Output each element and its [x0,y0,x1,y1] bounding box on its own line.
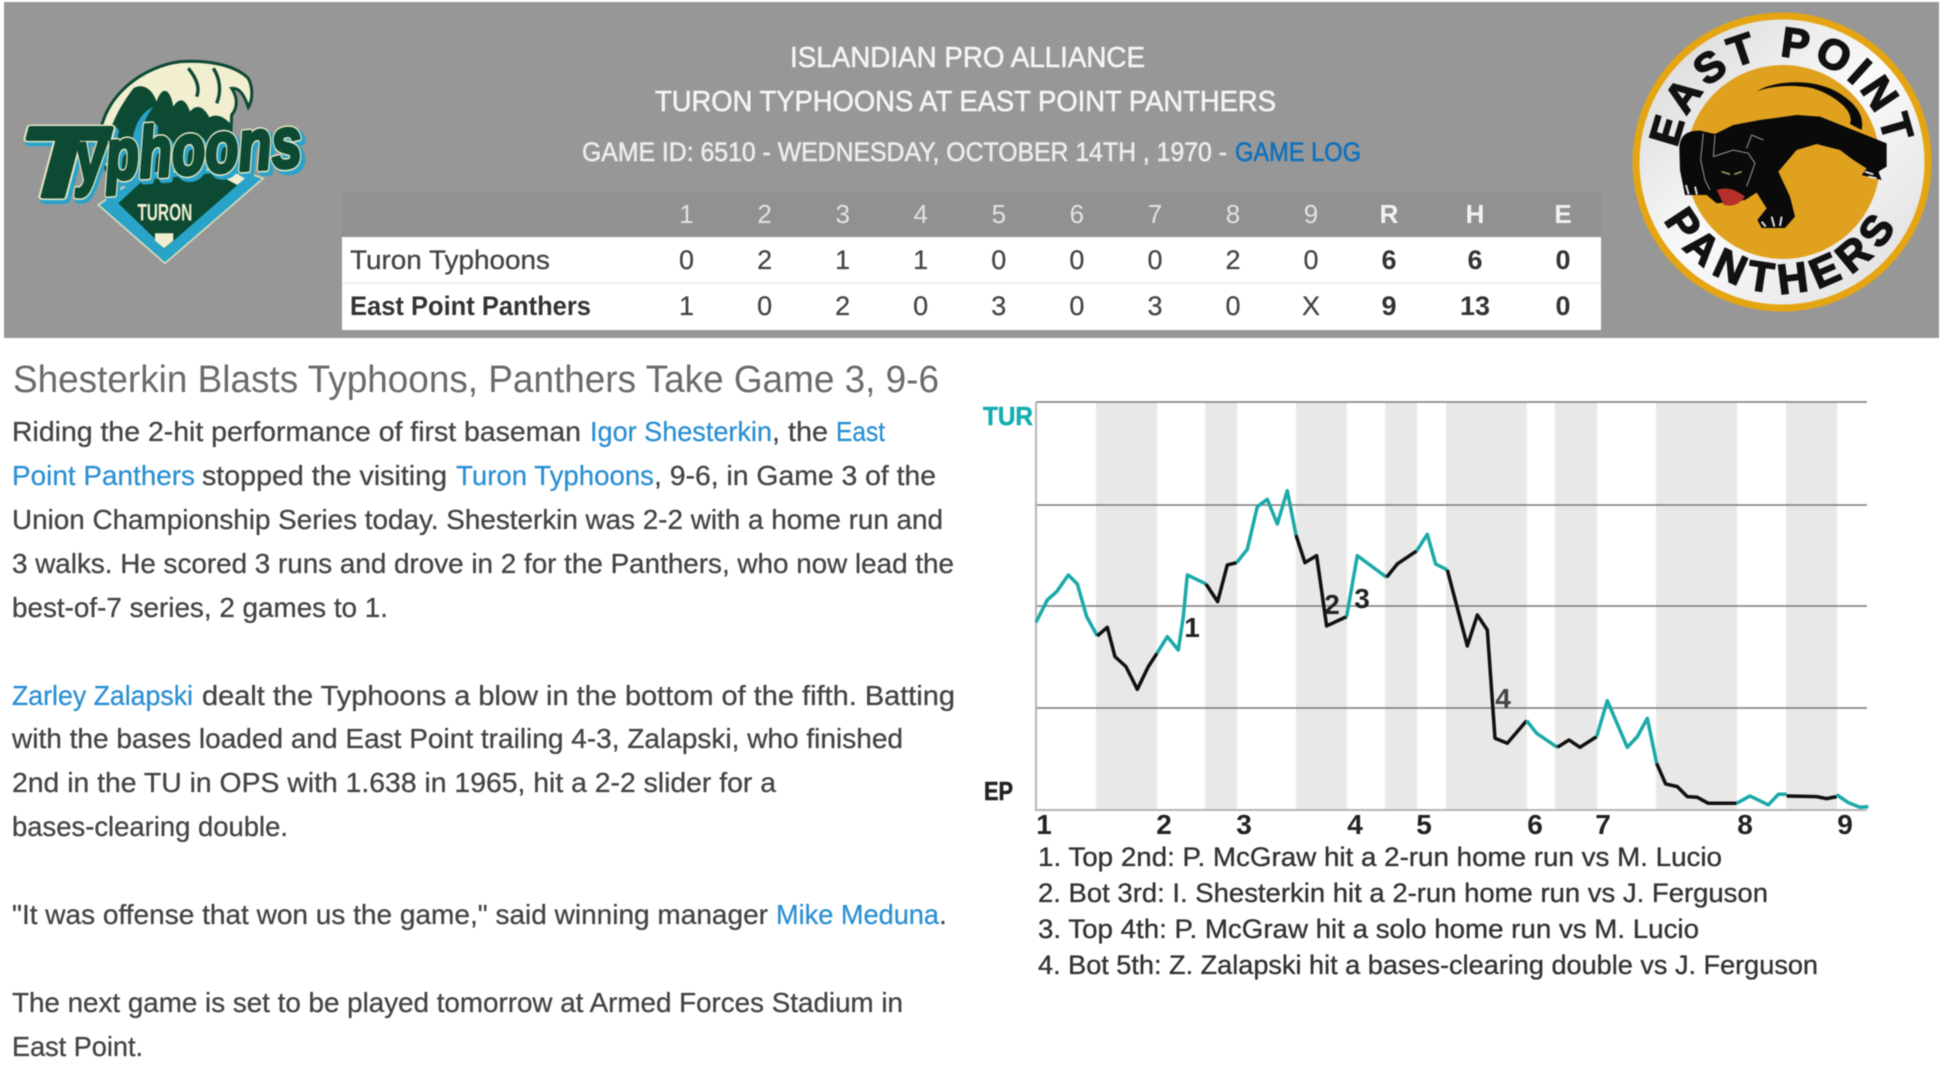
inning axis [1036,809,1853,840]
inning axis: 5 [1416,809,1432,840]
line score table: 3 [835,199,850,229]
article paragraph 3: "It was offense that won us the game," said winning manager [12,899,768,930]
line score table: X [1302,291,1320,321]
inning axis: 3 [1236,809,1252,840]
inning axis: 2 [1156,809,1172,840]
line score table: E [1554,199,1572,229]
game title text: ISLANDIAN PRO ALLIANCE [790,42,1145,74]
wordmark outline [18,102,304,219]
win probability chart: EP [984,776,1013,806]
article paragraph 3: Mike Meduna [776,899,939,930]
wordmark shadow: yphoons [72,105,308,201]
line score table: 0 [679,245,694,275]
article paragraph 1: East [836,416,885,447]
win probability chart [983,401,1868,840]
article paragraph 1: Riding the 2-hit performance of first baseman [12,416,581,447]
ring text: EAST POINT [1648,26,1915,147]
wordmark outline: yphoons [70,102,304,198]
article paragraph 1: best-of-7 series, 2 games to 1. [12,592,388,623]
wave [99,61,252,177]
line score table: 9 [1381,291,1397,321]
inning axis: 4 [1347,809,1363,840]
line score table: 1 [835,245,850,275]
line score table: 1 [679,291,694,321]
header band [4,2,1940,338]
line score table: 0 [1555,245,1571,275]
article paragraph 2: 2nd in the TU in OPS with 1.638 in 1965, hit a 2-2 slider for a [12,767,776,798]
inning axis: 8 [1737,809,1753,840]
event markers: 1 [1184,612,1200,643]
line score table: 2 [757,199,772,229]
key plays list: 2. Bot 3rd: I. Shesterkin hit a 2-run home run vs J. Ferguson [1038,878,1768,908]
line score table: 13 [1460,291,1490,321]
line score table: 8 [1226,199,1240,229]
article paragraph 2 [11,680,955,842]
line score table: 0 [991,245,1006,275]
probability line part 2 [1447,570,1868,807]
article paragraph 1 [12,416,954,623]
headline: Shesterkin Blasts Typhoons, Panthers Take Game 3, 9-6 [13,359,939,401]
line score table: 3 [991,291,1006,321]
line score table: 2 [757,245,772,275]
wordmark [18,102,304,219]
article paragraph 1: 3 walks. He scored 3 runs and drove in 2 for the Panthers, who now lead the [12,548,954,579]
line score table: East Point Panthers [350,291,591,321]
line score table: 5 [992,199,1006,229]
team label: TURON [137,200,192,227]
logo: East Point Panthers [1632,12,1932,312]
line score table: 6 [1070,199,1084,229]
inning axis: 6 [1527,809,1543,840]
wordmark shadow: T [21,110,115,222]
line score table: 4 [913,199,928,229]
article paragraph 2: with the bases loaded and East Point trailing 4-3, Zalapski, who finished [11,723,903,754]
line score table: Turon Typhoons [350,245,550,275]
line score table: 7 [1148,199,1162,229]
line score table: 1 [679,199,694,229]
diamond [98,168,263,263]
key plays list: 1. Top 2nd: P. McGraw hit a 2-run home run vs M. Lucio [1038,842,1722,872]
article paragraph 1: Turon Typhoons [456,460,654,491]
article paragraph 1: Point Panthers [12,460,195,491]
line score table: 0 [1147,245,1163,275]
article paragraph 1: Igor Shesterkin [590,416,772,447]
inning axis: 9 [1837,809,1853,840]
panther [1679,82,1887,228]
wordmark: T [18,107,112,219]
line score table: H [1466,199,1484,229]
article paragraph 4 [12,987,903,1062]
game title text: GAME ID: 6510 - WEDNESDAY, OCTOBER 14TH , 1970 - [582,137,1227,167]
line score table: 9 [1304,199,1318,229]
game title text: GAME LOG [1235,137,1361,167]
team labels: TUR [983,401,1033,431]
event markers: 2 [1324,589,1340,620]
line score table: 6 [1467,245,1483,275]
line score table: 1 [913,245,928,275]
line score table: 0 [1225,291,1241,321]
line score table: 0 [1069,245,1084,275]
grid [1036,402,1867,810]
line score table: 0 [757,291,772,321]
line score table: 3 [1147,291,1163,321]
key plays list: 3. Top 4th: P. McGraw hit a solo home run vs M. Lucio [1038,914,1699,944]
article paragraph 3: . [939,899,947,930]
probability line part 1 [1036,491,1447,689]
article paragraph 2: Zarley Zalapski [12,680,193,711]
event markers [1184,583,1511,714]
wordmark: yphoons [70,102,304,198]
inning bands [1096,402,1837,810]
line score table: 0 [913,291,928,321]
line score table [342,192,1601,330]
key plays list [1038,842,1818,980]
article paragraph 1: Union Championship Series today. Shesterkin was 2-2 with a home run and [12,504,943,535]
article paragraph 4: The next game is set to be played tomorrow at Armed Forces Stadium in [12,987,903,1018]
article paragraph 1: stopped the visiting [202,460,447,491]
article paragraph 1: , the [772,416,828,447]
line score table: 0 [1069,291,1084,321]
line score table: R [1380,199,1399,229]
article paragraph 2: bases-clearing double. [12,811,288,842]
line score table: 0 [1303,245,1319,275]
game title text: TURON TYPHOONS AT EAST POINT PANTHERS [655,86,1276,118]
event markers: 3 [1354,583,1370,614]
article paragraph 2: dealt the Typhoons a blow in the bottom of the fifth. Batting [202,680,955,711]
key plays list: 4. Bot 5th: Z. Zalapski hit a bases-clearing double vs J. Ferguson [1038,950,1818,980]
wordmark outline: T [18,107,112,219]
event markers: 4 [1495,683,1511,714]
line score table: 6 [1381,245,1397,275]
game title text [582,42,1361,167]
article paragraph 4: East Point. [12,1031,143,1062]
article paragraph 1: , 9-6, in Game 3 of the [654,460,936,491]
inning axis: 7 [1595,809,1611,840]
line score table: 0 [1555,291,1571,321]
inning axis: 1 [1036,809,1052,840]
ring text bottom: PANTHERS [1664,205,1894,296]
wordmark shadow [21,105,308,222]
line score table: 2 [1225,245,1241,275]
line score table: 2 [835,291,850,321]
logo: Turon Typhoons [18,61,308,263]
